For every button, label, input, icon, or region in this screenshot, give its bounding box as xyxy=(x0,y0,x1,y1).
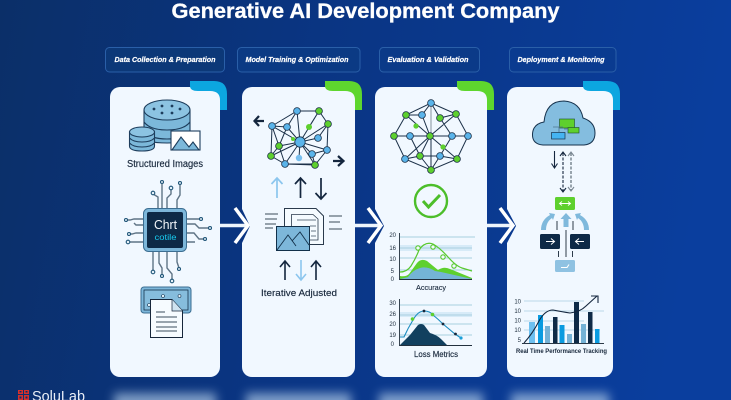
chart: accuracy xyxy=(389,233,475,292)
chart: accuracy: Accuracy xyxy=(416,283,446,292)
heading: data collection: Data Collection & Preparation xyxy=(114,57,216,64)
chart: loss metrics xyxy=(389,299,472,359)
label: structured images: Structured Images xyxy=(127,159,203,170)
chart: loss metrics: 0 xyxy=(391,342,395,348)
chart: performance tracking: 10 xyxy=(514,318,522,324)
chart: performance tracking: Real Time Performance Tracking xyxy=(516,348,607,355)
icon: deployment flow xyxy=(540,197,590,272)
arrow: step 3 to 4 xyxy=(487,208,516,243)
chart: loss metrics: 20 xyxy=(389,322,397,328)
arrow: right xyxy=(333,156,344,166)
chart: accuracy: 5 xyxy=(391,269,395,275)
arrow: step 2 to 3 xyxy=(355,208,384,243)
arrow: step 1 to 2 xyxy=(220,208,250,243)
arrows: feedback row xyxy=(280,260,321,280)
heading: evaluation: Evaluation & Validation xyxy=(388,57,468,64)
title: Generative AI Development Company xyxy=(172,0,560,23)
corner accent xyxy=(325,81,362,110)
card xyxy=(507,87,613,377)
chart: loss metrics: 19 xyxy=(389,333,397,339)
chart: performance tracking: 10 xyxy=(514,328,522,334)
corner accent xyxy=(190,81,227,110)
chart: performance tracking: 5 xyxy=(518,338,522,344)
arrows: cloud traffic xyxy=(552,151,574,192)
heading: data collection xyxy=(106,48,224,72)
panel: model training xyxy=(238,48,362,377)
chart: loss metrics: 30 xyxy=(389,301,397,307)
label: iterative adjusted: Iterative Adjusted xyxy=(261,288,337,299)
card xyxy=(375,87,487,377)
panel: deployment xyxy=(507,48,620,377)
corner accent xyxy=(583,81,620,110)
corner accent xyxy=(457,81,494,110)
heading: deployment xyxy=(510,48,616,72)
chart: accuracy: 20 xyxy=(389,233,397,239)
arrow: left xyxy=(254,116,264,126)
chart: performance tracking xyxy=(514,296,607,355)
icon: processor chip xyxy=(124,180,212,283)
arrows: iteration row xyxy=(272,178,326,199)
card xyxy=(242,87,355,377)
icon: processor chip: cotile xyxy=(154,233,177,242)
icon: processor chip: Chrt xyxy=(154,218,178,232)
heading: deployment: Deployment & Monitoring xyxy=(518,57,605,64)
chart: accuracy: 10 xyxy=(389,257,397,263)
icon: documents and image xyxy=(265,208,342,250)
icon: cloud xyxy=(532,101,595,145)
icon: neural network xyxy=(254,108,344,168)
icon: database and image xyxy=(130,100,200,151)
icon: evaluation network xyxy=(391,100,471,173)
panel: data collection xyxy=(106,48,227,377)
chart: performance tracking: 10 xyxy=(514,309,522,315)
heading: model training xyxy=(238,48,360,72)
chart: loss metrics: Loss Metrics xyxy=(414,350,458,359)
chart: accuracy: 16 xyxy=(389,246,397,252)
chart: performance tracking: 10 xyxy=(514,300,522,306)
chart: loss metrics: 26 xyxy=(389,312,397,318)
card reflections xyxy=(114,393,609,400)
panel: evaluation xyxy=(375,48,494,377)
icon: check mark xyxy=(415,185,447,217)
heading: model training: Model Training & Optimization xyxy=(246,57,348,64)
chart: accuracy: 0 xyxy=(391,277,395,283)
card xyxy=(110,87,220,377)
icon: tablet and document xyxy=(141,287,191,338)
heading: evaluation xyxy=(380,48,480,72)
